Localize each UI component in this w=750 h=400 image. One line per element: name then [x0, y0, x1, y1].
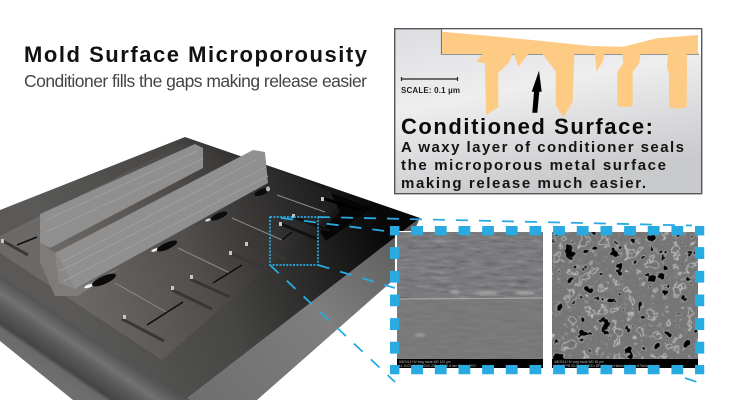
micrograph: conditioned surface: 11:10:07 AM 20.00 kV 200 x BF 10.8 mm Quanta FEG — [399, 364, 476, 368]
illustration: injection mold with molded bars — [0, 137, 420, 400]
runner lines — [115, 195, 325, 313]
micrograph: conditioned surface — [397, 232, 543, 368]
micrograph: bare porous surface: 4:00:33 PM 20.00 kV 2 000 x BF 10.5 mm Harbin Institute of Technology — [554, 364, 657, 368]
scale bar: SCALE: 0.1 µm — [401, 86, 460, 95]
dashed blue frame — [390, 226, 704, 374]
inner plate — [0, 144, 345, 360]
mold top surface — [0, 137, 420, 400]
reflections under bars — [40, 243, 120, 296]
title: Mold Surface Microporousity — [24, 42, 368, 67]
mold left rim — [0, 270, 190, 400]
white gap above surface — [442, 29, 701, 54]
panel body text: making release much easier. — [401, 175, 646, 192]
scale bar — [401, 77, 460, 95]
SEM micrographs with dashed frame — [390, 226, 704, 374]
metal surface outline — [442, 29, 699, 54]
panel heading: Conditioned Surface: — [401, 114, 653, 139]
dark pocket — [320, 193, 372, 241]
cross channels — [17, 232, 292, 325]
dotted selection square — [270, 217, 318, 265]
panel body text: A waxy layer of conditioner seals — [401, 139, 684, 156]
panel background — [395, 29, 702, 194]
molded bar, front — [55, 150, 268, 289]
white backing — [395, 231, 700, 369]
dashed leaders — [270, 217, 697, 382]
micrograph: bare porous surface: 4/8/2014 HV mag mode WD 50 µm — [554, 360, 604, 364]
slots — [3, 198, 360, 341]
micrograph: bare porous surface — [552, 232, 698, 368]
waxy conditioner layer — [442, 32, 698, 117]
mold side face — [185, 218, 420, 400]
panel body text — [401, 139, 684, 192]
zoom callout dashed leader lines — [270, 217, 697, 382]
panel: conditioned surface diagram — [395, 29, 702, 194]
micrograph: conditioned surface: 8/8/2014 HV mag mode WD 100 µm — [399, 360, 451, 364]
subtitle: Conditioner fills the gaps making release easier — [24, 71, 367, 91]
gate holes — [84, 186, 271, 289]
arrow pointing to surface — [532, 71, 542, 113]
molded bar, rear — [40, 144, 203, 248]
panel body text: the microporous metal surface — [401, 157, 666, 174]
ejector pins — [1, 197, 324, 319]
